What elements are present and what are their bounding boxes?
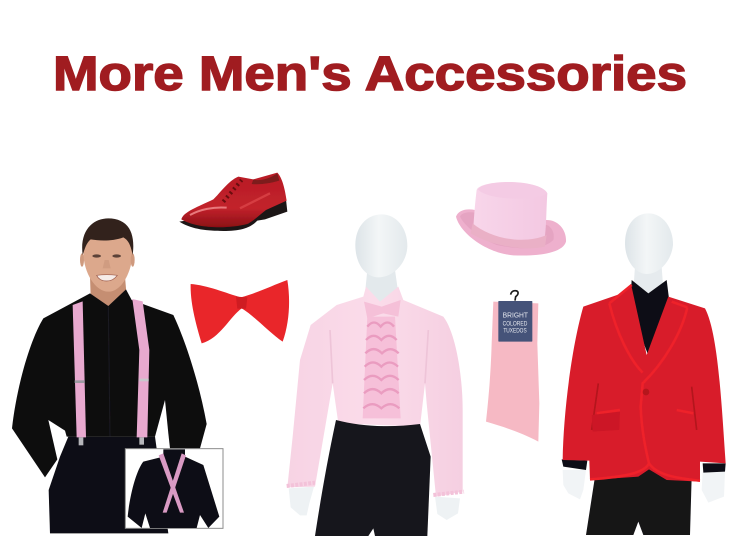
cuffs [562,459,726,473]
pink sock with packaging [486,291,539,442]
black trousers [586,465,692,535]
mannequin hands [289,487,460,520]
man's black shirt [12,289,207,477]
photo: mannequin in pink ruffled tuxedo shirt [287,214,464,536]
inset: back view of suspenders [125,449,223,528]
sock label: TUXEDOS [503,328,527,335]
sock label: COLORED [503,321,528,328]
photo: mannequin in red satin-trim jacket [562,213,726,535]
sock label [498,301,532,342]
pink shirt [287,287,463,497]
sock hanger [511,291,518,301]
mannequin hands [563,470,725,503]
shirt cuffs [287,483,464,495]
pink top hat [456,182,566,256]
suspenders [73,299,149,445]
man's neck and face [80,218,135,313]
title: More Men's Accessories [53,48,687,101]
red jacket [563,284,726,482]
black undershirt [630,280,670,360]
photo: man wearing pink suspenders [12,218,223,533]
satin lapels [590,285,700,481]
mannequin head [625,213,673,298]
man's trousers [49,437,168,533]
black trousers [315,420,431,536]
sock label: BRIGHT [503,310,528,319]
red bow tie [191,280,289,343]
red patent shoe [179,173,287,231]
bow tie and ruffles [363,300,401,418]
mannequin head [355,214,407,303]
